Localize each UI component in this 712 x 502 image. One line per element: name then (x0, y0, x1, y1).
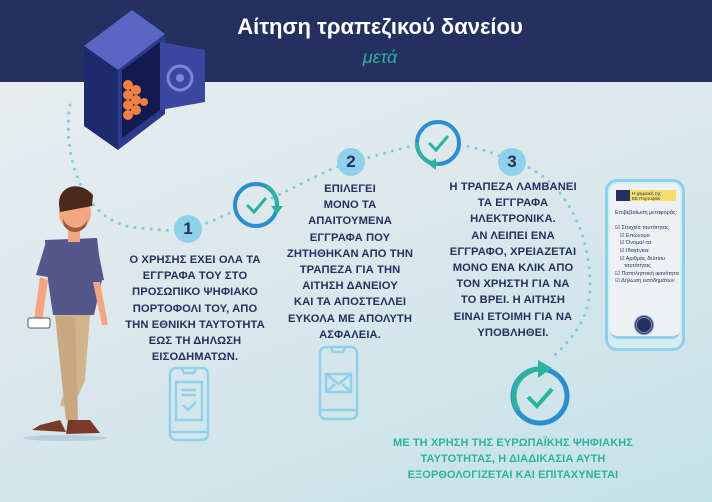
checklist: ταυτότητας (624, 263, 651, 269)
text: step 1: ΠΡΟΣΩΠΙΚΟ ΨΗΦΙΑΚΟ (132, 286, 258, 298)
text: step 1: Ο ΧΡΗΣΗΣ ΕΧΕΙ ΟΛΑ ΤΑ (129, 254, 261, 266)
text: step 2: ΑΠΑΙΤΟΥΜΕΝΑ (308, 215, 392, 227)
text: step 2: ΤΡΑΠΕΖΑ ΓΙΑ ΤΗΝ (300, 264, 400, 276)
text: step 1: ΕΙΣΟΔΗΜΑΤΩΝ. (152, 351, 238, 363)
checklist: ☑ Πιστοληπτική ικανότητα (615, 271, 679, 277)
text: step 3: ΥΠΟΒΛΗΘΕΙ. (477, 327, 549, 339)
title: Αίτηση τραπεζικού δανείου (237, 14, 523, 39)
step 1 number (174, 215, 202, 243)
text: step 2: ΑΣΦΑΛΕΙΑ. (319, 329, 381, 341)
text: step 3: ΕΓΓΡΑΦΟ, ΧΡΕΙΑΖΕΤΑΙ (450, 246, 576, 258)
step 2 number (337, 148, 365, 176)
bottom text: ΤΑΥΤΟΤΗΤΑΣ, Η ΔΙΑΔΙΚΑΣΙΑ ΑΥΤΗ (421, 453, 605, 465)
bottom text (393, 436, 633, 481)
text: step 2 (287, 183, 413, 341)
text: step 1: ΤΗΝ ΕΘΝΙΚΗ ΤΑΥΤΟΤΗΤΑ (125, 319, 265, 331)
step 3 number: 3 (507, 152, 517, 171)
text: step 2: ΜΟΝΟ ΤΑ (324, 199, 376, 211)
step 1 number: 1 (183, 219, 193, 238)
subtitle: μετά (363, 47, 397, 67)
EU badge: Η ψηφιακή της (632, 191, 661, 196)
text: step 1: ΕΓΓΡΑΦΑ ΤΟΥ ΣΤΟ (143, 270, 247, 282)
checklist: ☑ Στοιχεία ταυτότητας (615, 225, 669, 231)
bottom text: ΕΞΟΡΘΟΛΟΓΙΖΕΤΑΙ ΚΑΙ ΕΠΙΤΑΧΥΝΕΤΑΙ (408, 469, 618, 481)
text: step 3: ΗΛΕΚΤΡΟΝΙΚΑ. (470, 213, 556, 225)
text: step 3: ΤΑ ΕΓΓΡΑΦΑ (478, 197, 548, 209)
text: step 2: ΑΙΤΗΣΗ ΔΑΝΕΙΟΥ (302, 280, 398, 292)
checklist: ☑ Δήλωση εισοδημάτων (615, 278, 675, 284)
text: step 2: ΚΑΙ ΤΑ ΑΠΟΣΤΕΛΛΕΙ (294, 296, 406, 308)
text: step 3: Η ΤΡΑΠΕΖΑ ΛΑΜΒΑΝΕΙ (449, 181, 577, 193)
text: step 2: ΕΓΓΡΑΦΑ ΠΟΥ (310, 232, 390, 244)
text: step 2: ΕΠΙΛΕΓΕΙ (324, 183, 376, 195)
panel: EU wallet phone (605, 179, 685, 351)
header band (0, 0, 712, 82)
checklist: ☑ Όνομα/-τα (620, 240, 651, 246)
text: step 3: ΤΟ ΒΡΕΙ. Η ΑΙΤΗΣΗ (461, 294, 565, 306)
checklist: Επιβεβαίωση μεταφοράς: (615, 210, 677, 216)
text: step 3 (449, 181, 577, 339)
checklist (615, 210, 679, 284)
step 2 number: 2 (346, 152, 356, 171)
EU badge: ΕΕ Πορτοφόλι (632, 196, 660, 201)
checklist: ☑ Ιθαγένεια (620, 248, 649, 254)
step 3 number (498, 148, 526, 176)
checklist: ☑ Επώνυμο (620, 233, 650, 239)
text: step 3: ΑΝ ΛΕΙΠΕΙ ΕΝΑ (471, 230, 555, 242)
text: step 1: ΕΩΣ ΤΗ ΔΗΛΩΣΗ (149, 335, 241, 347)
text: step 1 (125, 254, 265, 363)
text: step 3: ΕΙΝΑΙ ΕΤΟΙΜΗ ΓΙΑ ΝΑ (454, 311, 572, 323)
icon: fingerprint (634, 315, 654, 335)
bottom text: ΜΕ ΤΗ ΧΡΗΣΗ ΤΗΣ ΕΥΡΩΠΑΪΚΗΣ ΨΗΦΙΑΚΗΣ (393, 437, 633, 449)
text: step 3: ΤΟΝ ΧΡΗΣΤΗ ΓΙΑ ΝΑ (456, 278, 570, 290)
text: step 3: ΜΟΝΟ ΕΝΑ ΚΛΙΚ ΑΠΟ (453, 262, 573, 274)
checklist: ☑ Αριθμός δελτίου (620, 256, 665, 262)
text: step 1: ΠΟΡΤΟΦΟΛΙ ΤΟΥ, ΑΠΟ (133, 303, 257, 315)
text: step 2: ΕΥΚΟΛΑ ΜΕ ΑΠΟΛΥΤΗ (288, 313, 412, 325)
EU badge (616, 190, 676, 201)
text: step 2: ΖΗΤΗΘΗΚΑΝ ΑΠΟ ΤΗΝ (287, 248, 413, 260)
